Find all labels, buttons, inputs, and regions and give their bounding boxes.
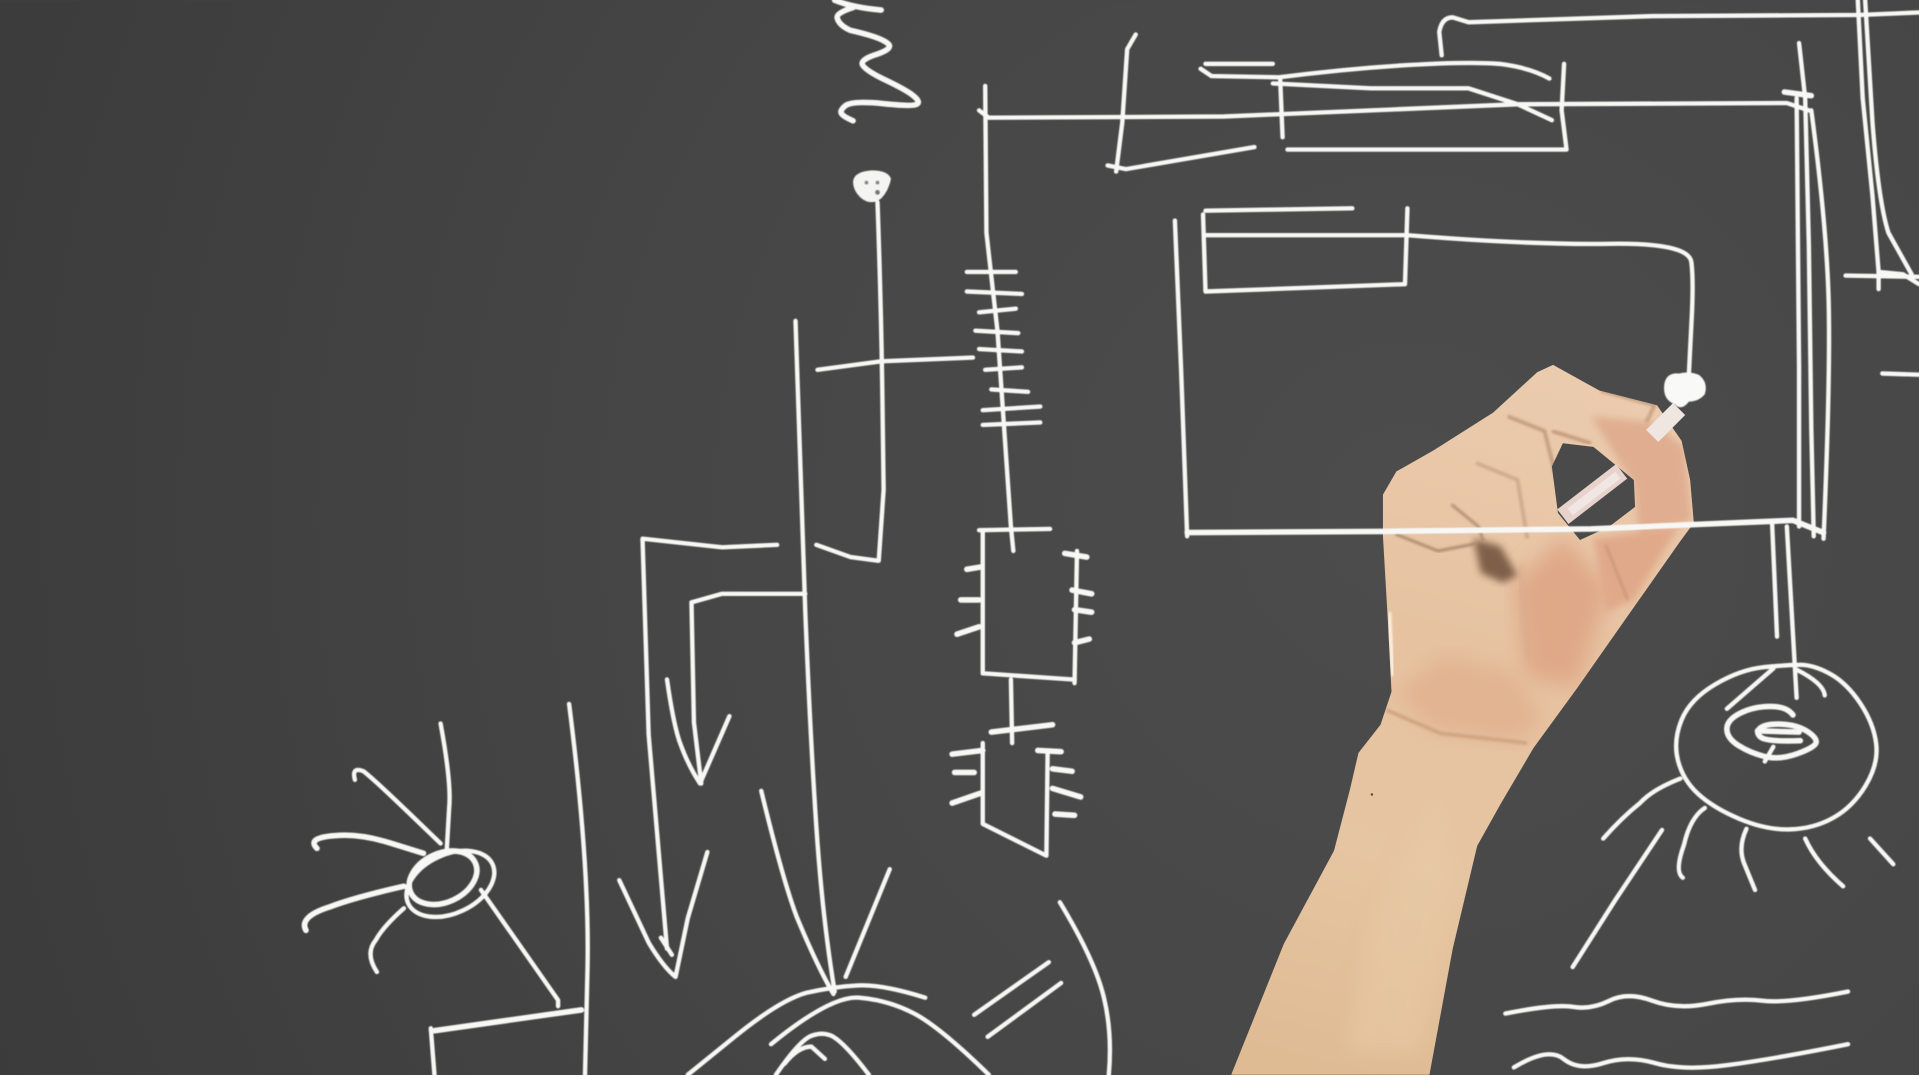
bottom dome with fan bbox=[688, 791, 989, 1075]
lower component box bbox=[952, 743, 1081, 856]
upper component box bbox=[957, 529, 1092, 743]
large down arrow bbox=[619, 852, 707, 977]
drop lines to wheel bbox=[1772, 524, 1797, 698]
inner box bbox=[1175, 221, 1824, 536]
top right frame lines bbox=[1439, 0, 1919, 375]
squiggle bbox=[835, 0, 918, 121]
waves bbox=[1505, 992, 1848, 1068]
small rectangle with wire to marker bbox=[1203, 208, 1693, 374]
marker cap bbox=[1652, 409, 1679, 436]
top sketch block bbox=[979, 34, 1809, 172]
central vertical bbox=[985, 86, 1013, 551]
lollipop connector bbox=[816, 170, 973, 561]
gap between fingers bbox=[1552, 443, 1635, 540]
marker barrel bbox=[1563, 471, 1622, 517]
lower left spider node bbox=[305, 724, 558, 1006]
double strokes and curve bbox=[974, 902, 1110, 1075]
wheel with rays bbox=[1573, 665, 1893, 967]
lower left bracket bbox=[431, 704, 588, 1075]
right vertical bundle bbox=[1784, 43, 1829, 539]
small down arrow bbox=[667, 679, 729, 783]
marker blob bbox=[1664, 373, 1706, 407]
long vertical with branches bbox=[643, 321, 835, 992]
spring ticks bbox=[967, 272, 1040, 425]
hand holding marker bbox=[1231, 365, 1694, 1075]
